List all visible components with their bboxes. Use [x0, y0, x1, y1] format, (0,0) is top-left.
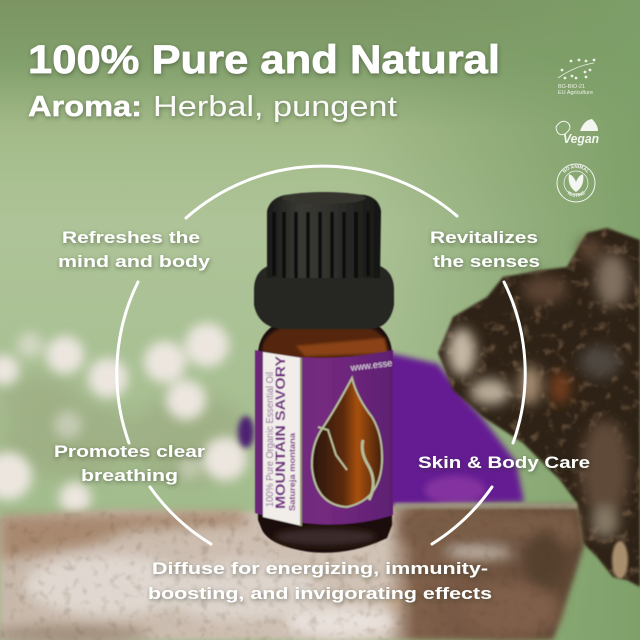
arc: left — [117, 282, 138, 443]
label: refreshes: mind and body — [58, 253, 211, 271]
label: revitalizes: Revitalizes — [430, 229, 538, 247]
product bottle — [254, 192, 394, 553]
label vertical text — [265, 355, 297, 511]
label vertical text: MOUNTAIN SAVORY — [272, 355, 288, 509]
icon: no animal testing — [556, 164, 596, 202]
website text: www.esse — [349, 358, 393, 374]
icon: no animal testing: NO ANIMAL — [562, 164, 588, 174]
text labels — [54, 229, 590, 603]
label vertical text: 100% Pure Organic Essential Oil — [265, 372, 276, 507]
dropper collar — [254, 266, 394, 329]
icon: vegan logo — [556, 119, 599, 146]
label: refreshes — [58, 229, 211, 271]
arc: top — [186, 166, 457, 218]
icon: no animal testing: TESTING — [568, 190, 585, 197]
label: revitalizes — [430, 229, 540, 271]
rock: right side — [438, 228, 640, 587]
label vertical text: Satureja montana — [288, 432, 297, 511]
label: promotes clear breathing — [54, 443, 206, 485]
bottle glass — [258, 322, 392, 553]
icon: vegan logo: Vegan — [563, 131, 599, 146]
arc: lower right — [432, 487, 492, 544]
amber oil highlight — [262, 328, 389, 360]
icon: EU organic leaf: BG-BIO-21 — [558, 84, 585, 90]
purple label — [255, 350, 393, 525]
purple cloth behind bottle — [238, 352, 524, 506]
strip edge — [300, 358, 302, 526]
subtitle: aroma: Herbal, pungent — [153, 91, 397, 123]
label: diffuse: boosting, and invigorating effects — [148, 585, 492, 603]
white label strip — [263, 352, 302, 526]
decorative circle arcs — [117, 166, 525, 544]
subtitle: aroma: Aroma: — [28, 91, 142, 123]
background: blurred white flowers — [0, 323, 250, 514]
label: refreshes: Refreshes the — [62, 229, 200, 247]
rock: foreground ledge — [0, 503, 584, 640]
label: revitalizes: the senses — [433, 253, 540, 271]
label: promotes clear breathing: Promotes clear — [54, 443, 206, 461]
label: diffuse: Diffuse for energizing, immunity- — [152, 560, 488, 578]
title: 100% Pure and Natural — [28, 38, 500, 82]
label: skin and body care: Skin & Body Care — [418, 454, 590, 472]
label drop emblem — [312, 378, 382, 507]
label: promotes clear breathing: breathing — [81, 467, 178, 485]
bottle base reflection — [275, 529, 375, 545]
cap — [267, 192, 381, 278]
subtitle: aroma — [28, 91, 397, 123]
arc: lower left — [150, 487, 211, 544]
icon: EU organic leaf: EU Agriculture — [558, 90, 593, 96]
label: diffuse — [148, 560, 492, 603]
icon: EU organic leaf — [558, 59, 595, 96]
arc: right — [504, 282, 525, 443]
